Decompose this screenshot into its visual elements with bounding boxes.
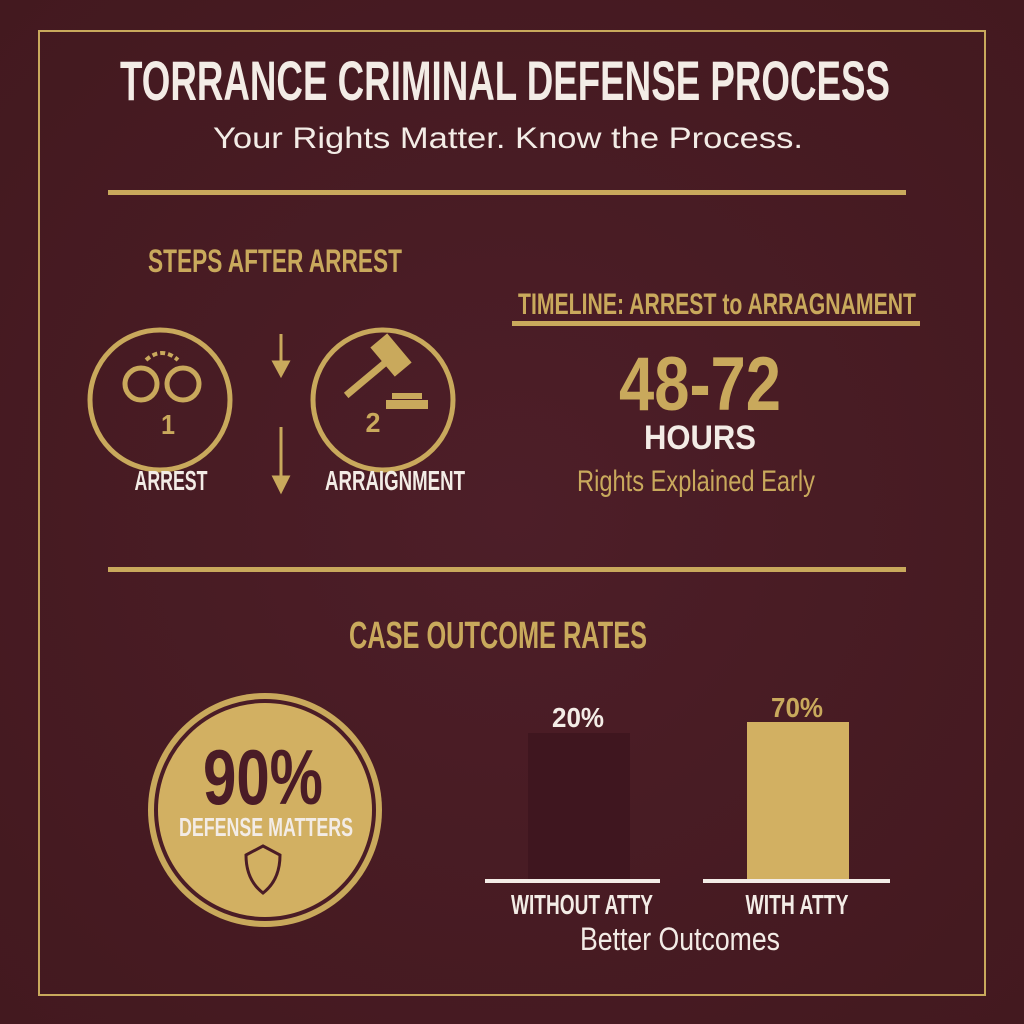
steps heading: STEPS AFTER ARREST bbox=[148, 243, 402, 279]
90% badge: DEFENSE MATTERS bbox=[179, 812, 353, 842]
step 2: arraignment: 2 bbox=[366, 407, 380, 438]
step 1: arrest: ARREST bbox=[134, 465, 208, 496]
90% badge bbox=[148, 693, 382, 927]
timeline stat: 48-72 bbox=[619, 342, 781, 427]
bar chart: WITH ATTY bbox=[746, 889, 849, 920]
timeline stat: Rights Explained Early bbox=[577, 465, 815, 498]
step 2: arraignment bbox=[313, 330, 465, 496]
step 2: arraignment: ARRAIGNMENT bbox=[325, 465, 465, 496]
arrows bbox=[274, 334, 288, 491]
bar chart: 20% bbox=[552, 702, 604, 733]
bar chart: 70% bbox=[771, 692, 823, 723]
timeline stat: HOURS bbox=[644, 419, 756, 457]
step 1: arrest bbox=[90, 330, 230, 496]
step 1: arrest: 1 bbox=[161, 409, 175, 440]
90% badge: 90% bbox=[203, 733, 323, 821]
timeline stat bbox=[577, 342, 815, 498]
outcomes heading: CASE OUTCOME RATES bbox=[349, 615, 647, 657]
subtitle: Your Rights Matter. Know the Process. bbox=[213, 122, 803, 155]
bar chart: WITHOUT ATTY bbox=[511, 889, 653, 920]
bar chart: Better Outcomes bbox=[580, 921, 780, 957]
bar chart bbox=[485, 692, 890, 957]
